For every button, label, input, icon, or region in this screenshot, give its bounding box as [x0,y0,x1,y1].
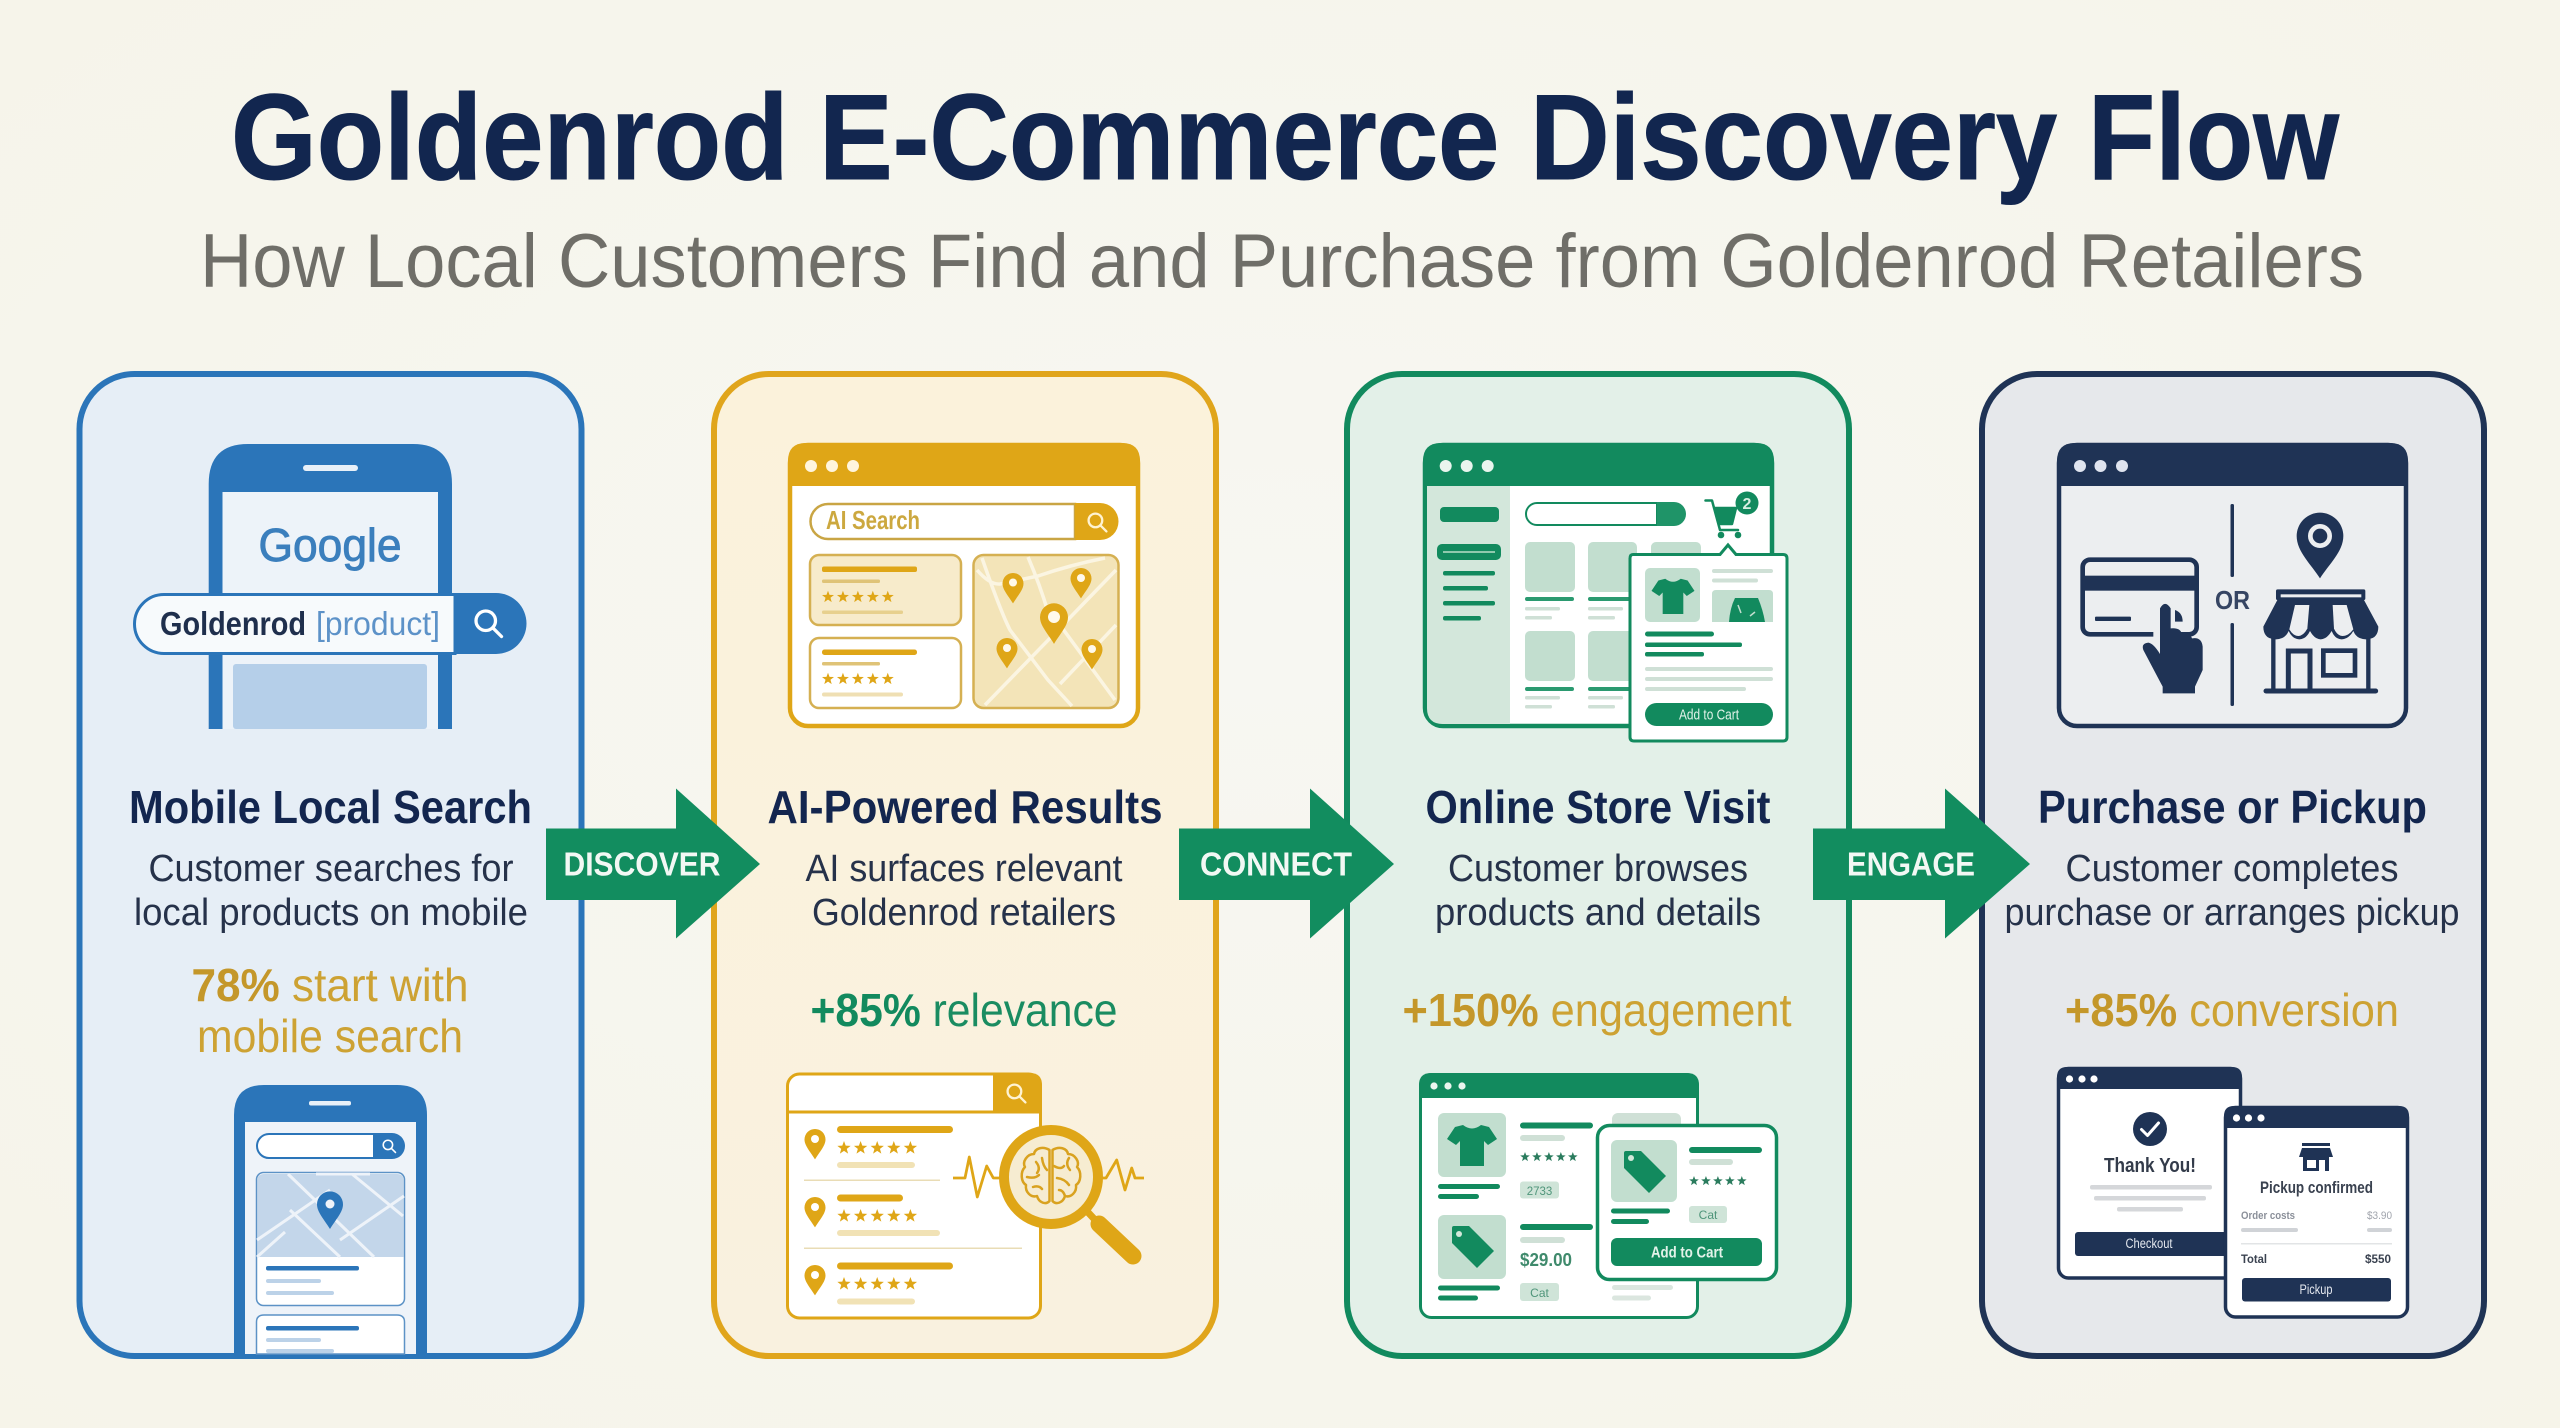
arrow: connect [1179,788,1394,938]
illustration: phone with Google search: Google [258,519,402,571]
icon: small store [2299,1143,2333,1171]
sidebar [1437,507,1501,620]
description [2004,848,2460,934]
window: pickup confirmed: Order costs [2241,1210,2295,1222]
arrow: engage [1813,788,2030,938]
stat: 78%: 78% start with [192,959,468,1011]
description [134,848,528,934]
description: Goldenrod retailers [812,892,1116,934]
heading: Purchase or Pickup [2038,781,2427,833]
cart icon with badge: 2 [1743,496,1752,513]
illustration: product list with add to cart card: Cat [1530,1286,1549,1300]
arrow: discover: DISCOVER [564,846,721,882]
illustration: online store window with product popup [1423,443,1787,741]
illustration: product list with add to cart card [1419,1073,1776,1318]
illustration: phone with Google search: [product] [316,605,440,642]
window: pickup confirmed: Total [2241,1252,2267,1266]
illustration: ranked results and AI magnifier [787,1073,1144,1318]
illustration: phone with Google search: Goldenrod [160,605,306,642]
product grid [1525,542,1701,681]
panel background [714,374,1216,1356]
panel background [80,374,582,1356]
magnifier with brain [1004,1130,1133,1256]
description: products and details [1435,892,1761,934]
arrow: connect: CONNECT [1200,846,1352,882]
description [1435,848,1761,934]
stat: +85% conversion: +85% conversion [2065,984,2399,1036]
stat: +150% engagement: +150% engagement [1402,984,1792,1036]
title: Goldenrod E-Commerce Discovery Flow [231,69,2340,205]
stat: 78%: mobile search [197,1010,463,1062]
arrow: discover [546,788,760,938]
window: pickup confirmed: Pickup confirmed [2260,1179,2373,1197]
panel background [1347,374,1849,1356]
illustration: product list with add to cart card: $29.00 [1520,1250,1572,1270]
heading: AI-Powered Results [768,781,1162,833]
window: pickup confirmed: $3.90 [2367,1210,2392,1222]
icon: credit card and pointing hand [2083,560,2203,693]
illustration: AI search window with map [788,443,1140,726]
panel: AI-powered results [714,374,1216,1356]
description: Customer searches for [148,848,514,890]
panel background [1982,374,2484,1356]
cart icon with badge [1706,492,1758,538]
add to cart card: Cat [1699,1208,1718,1222]
illustration: card payment or store pickup window: OR [2215,585,2250,615]
description: Customer completes [2066,848,2398,890]
panel: online store visit [1347,374,1849,1356]
description [806,848,1123,934]
add to cart card: Add to Cart [1651,1244,1724,1262]
subtitle: How Local Customers Find and Purchase from Goldenrod Retailers [200,219,2364,304]
panel: mobile local search [80,374,582,1356]
add to cart card [1598,1126,1776,1280]
product popup: Add to Cart [1679,708,1739,724]
panel: purchase or pickup [1982,374,2484,1356]
description: purchase or arranges pickup [2004,892,2460,934]
illustration: AI search window with map: AI Search [826,505,920,535]
description: Customer browses [1448,848,1748,890]
window: thank you: Checkout [2126,1236,2173,1251]
description: local products on mobile [134,892,528,934]
window: pickup confirmed: Pickup [2300,1282,2332,1297]
store search bar [1526,503,1657,525]
illustration: thank you and pickup confirmation windows [2057,1067,2409,1317]
icon: pin and storefront [2263,513,2378,691]
illustration: product list with add to cart card: 2733 [1527,1186,1552,1198]
heading: Mobile Local Search [129,781,532,833]
stat: +85% relevance: +85% relevance [810,984,1118,1036]
heading: Online Store Visit [1426,781,1770,833]
illustration: phone with Google search [134,444,526,729]
product popup [1630,545,1787,741]
illustration: phone with local map [234,1085,427,1354]
pulse lines [953,1157,1144,1197]
arrow: engage: ENGAGE [1847,846,1975,882]
illustration: card payment or store pickup window [2057,443,2408,726]
description: AI surfaces relevant [806,848,1123,890]
stat: 78% [192,959,468,1062]
window: thank you [2057,1067,2242,1278]
window: pickup confirmed [2224,1106,2409,1317]
window: thank you: Thank You! [2104,1155,2196,1177]
window: pickup confirmed: $550 [2365,1252,2391,1266]
